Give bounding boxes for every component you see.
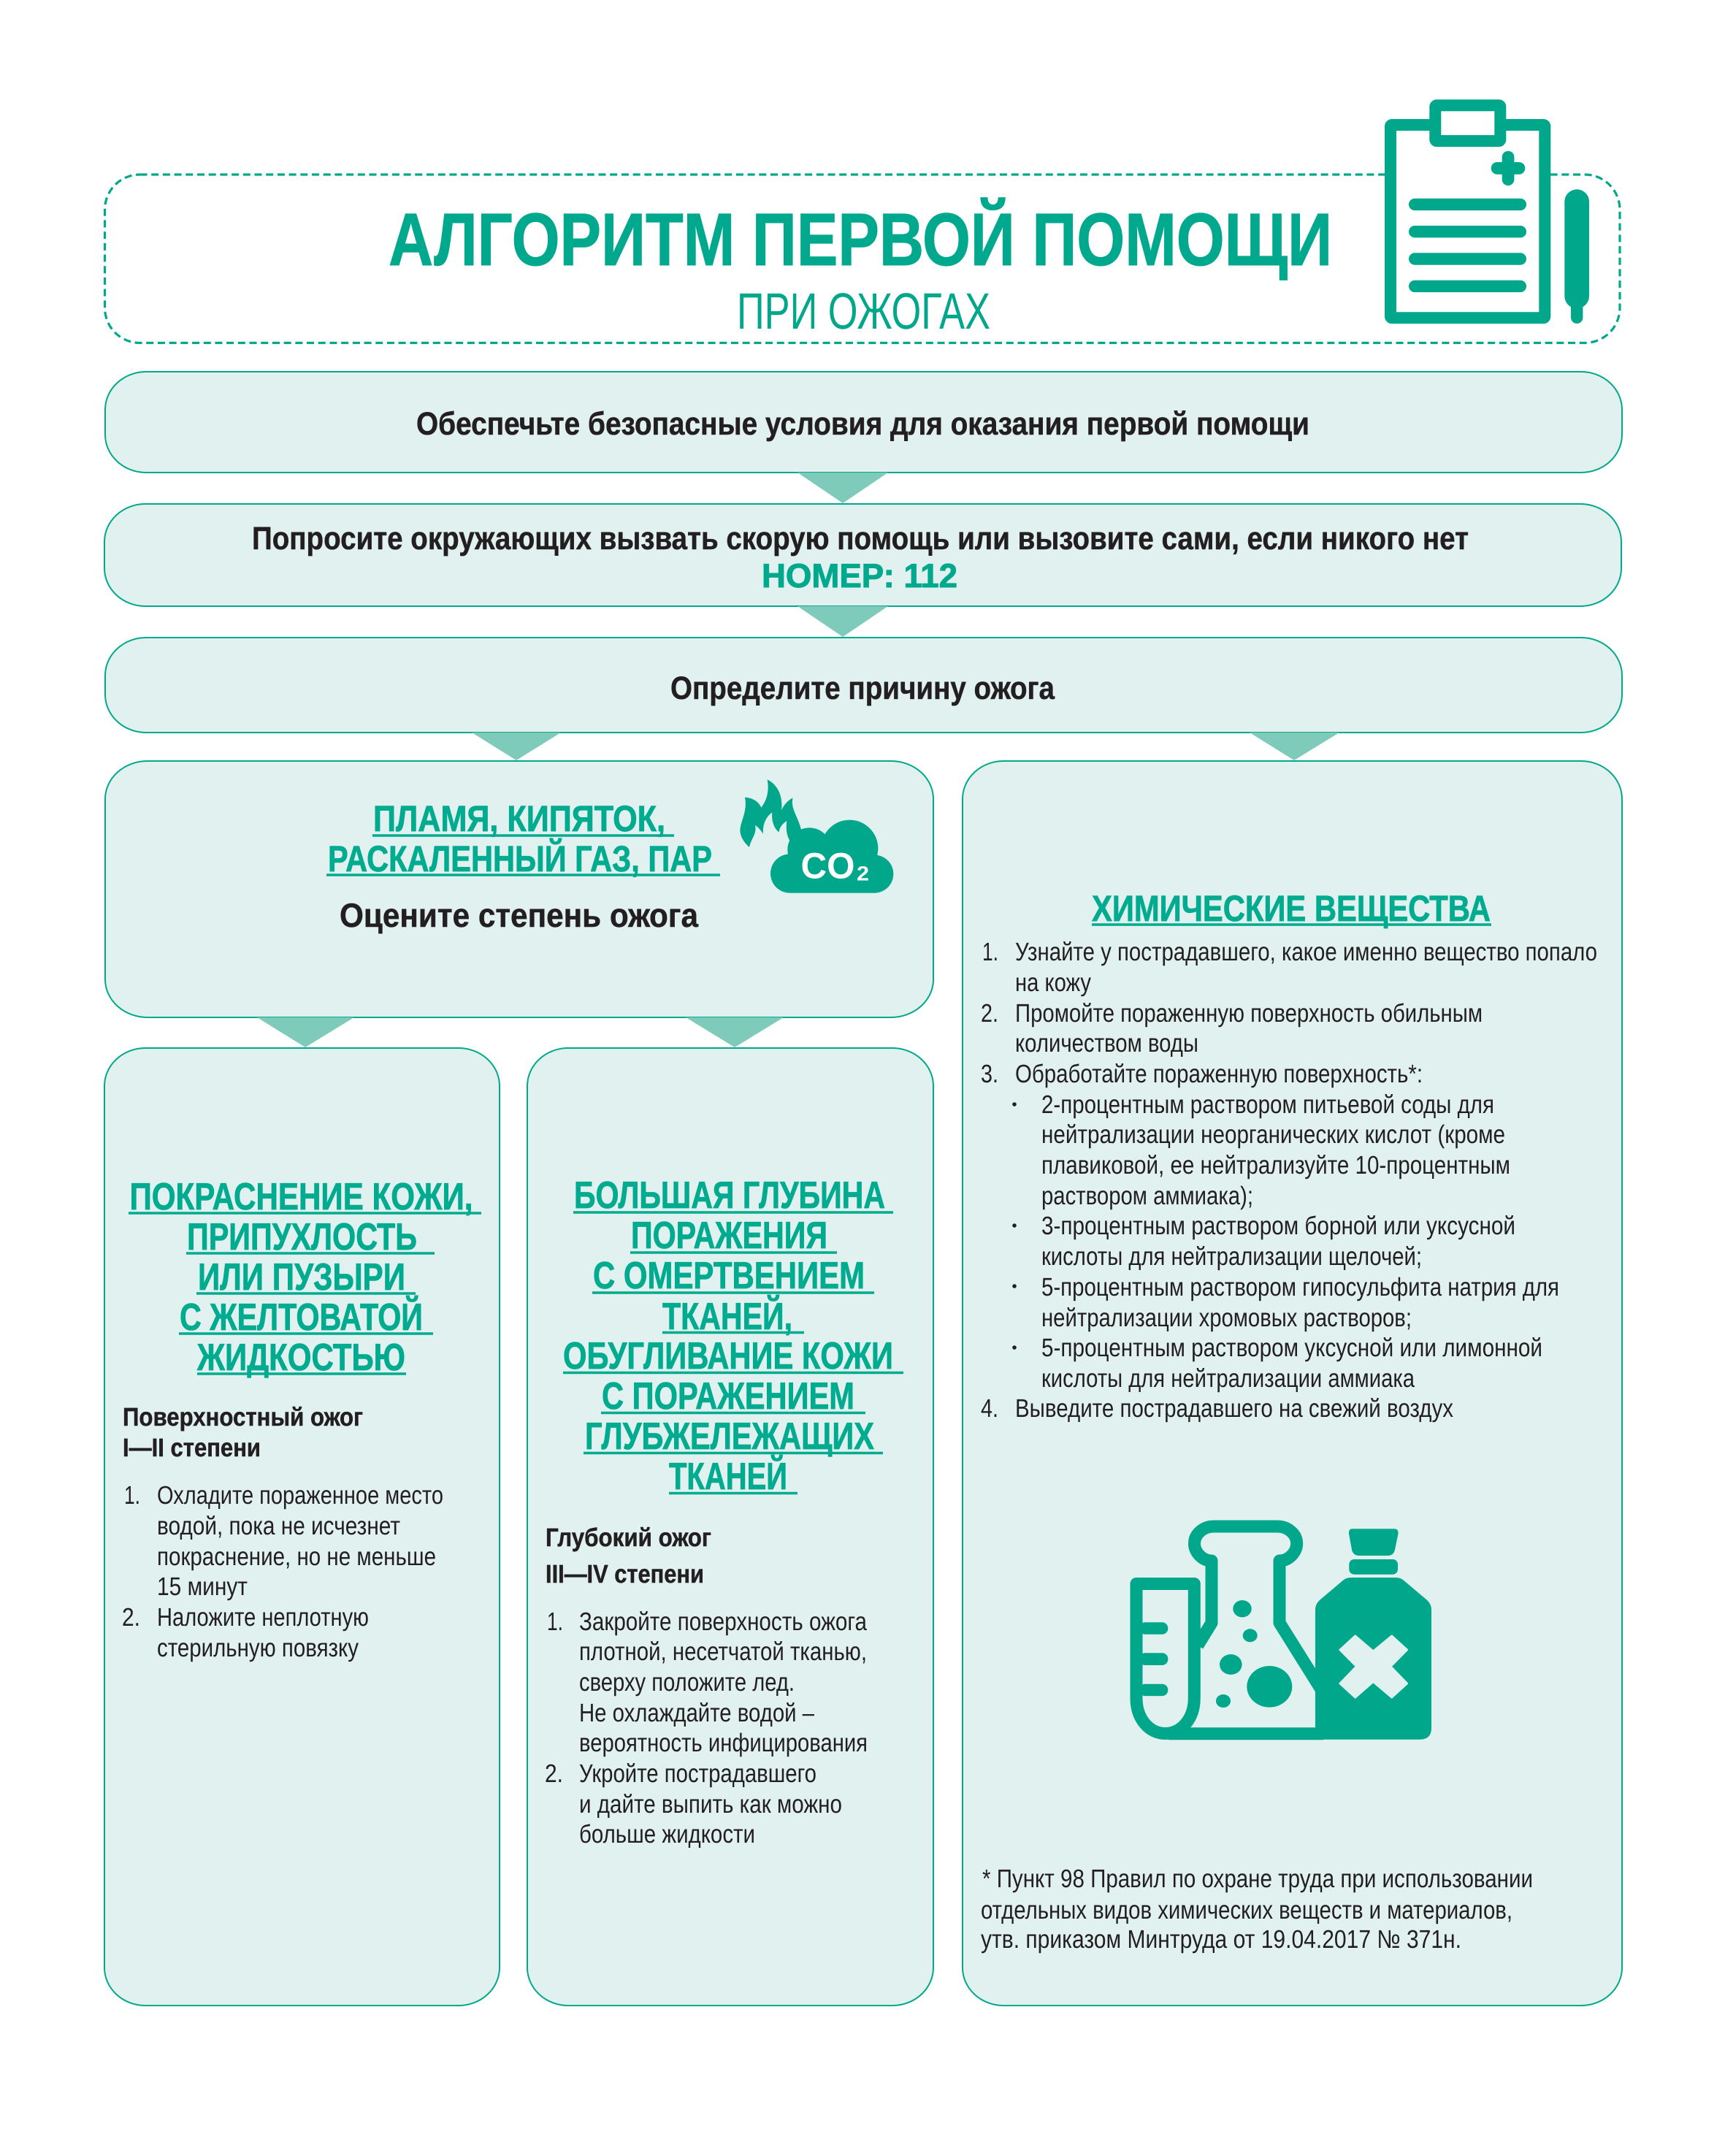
- burn degree label: Глубокий ожог: [546, 1524, 711, 1552]
- footnote: утв. приказом Минтруда от 19.04.2017 № 371н.: [981, 1925, 1461, 1954]
- heading: chemicals: ХИМИЧЕСКИЕ ВЕЩЕСТВА: [1092, 888, 1491, 929]
- burn degree label: I—II степени: [123, 1434, 261, 1462]
- heading: deep burn symptoms: ОБУГЛИВАНИЕ КОЖИ: [563, 1335, 893, 1377]
- step 1 panel: [105, 372, 1622, 473]
- first aid steps: deep burn: Не охлаждайте водой –: [579, 1699, 814, 1727]
- first aid steps: superficial burn: водой, пока не исчезнет: [157, 1512, 400, 1540]
- first aid steps: deep burn: вероятность инфицирования: [579, 1729, 868, 1757]
- footnote: отдельных видов химических веществ и материалов,: [981, 1896, 1512, 1924]
- first aid steps: deep burn: 2.: [545, 1759, 563, 1788]
- panel: superficial burn: [104, 1048, 500, 2006]
- first aid steps: chemicals: Узнайте у пострадавшего, какое именно вещество попало: [1015, 938, 1597, 966]
- subtitle: ПРИ ОЖОГАХ: [737, 283, 990, 340]
- first aid steps: chemicals: Обработайте пораженную поверхность*:: [1015, 1060, 1423, 1088]
- first aid steps: chemicals: на кожу: [1015, 968, 1091, 997]
- first aid steps: chemicals: кислоты для нейтрализации аммиака: [1041, 1364, 1415, 1393]
- heading: deep burn symptoms: БОЛЬШАЯ ГЛУБИНА: [574, 1174, 885, 1217]
- heading: deep burn symptoms: ТКАНЕЙ: [669, 1454, 787, 1498]
- first aid steps: chemicals: нейтрализации неорганических кислот (кроме: [1041, 1120, 1505, 1149]
- icon: flame and CO2 cloud: [740, 779, 893, 893]
- icon: flask, test tube and poison bottle: [1136, 1526, 1431, 1740]
- first aid steps: superficial burn: [122, 1481, 443, 1662]
- heading: deep burn symptoms: [563, 1174, 903, 1498]
- panel: chemicals: [963, 761, 1622, 2006]
- step 3 panel: [105, 638, 1622, 733]
- first aid steps: chemicals: Промойте пораженную поверхность обильным: [1015, 999, 1483, 1028]
- heading: superficial burn symptoms: С ЖЕЛТОВАТОЙ: [180, 1295, 423, 1339]
- step 3 text: Определите причину ожога: [670, 670, 1055, 706]
- burn degree label: [546, 1524, 711, 1589]
- instruction: assess degree: Оцените степень ожога: [340, 896, 698, 934]
- first aid steps: chemicals: кислоты для нейтрализации щелочей;: [1041, 1242, 1422, 1271]
- first aid steps: deep burn: Укройте пострадавшего: [579, 1759, 816, 1788]
- heading: deep burn symptoms: С ОМЕРТВЕНИЕМ: [593, 1255, 865, 1297]
- burn degree label: Поверхностный ожог: [123, 1403, 363, 1431]
- first aid steps: chemicals: 2.: [981, 999, 998, 1028]
- heading: superficial burn symptoms: ПОКРАСНЕНИЕ КОЖИ,: [130, 1176, 473, 1218]
- heading: superficial burn symptoms: [129, 1176, 481, 1379]
- first aid steps: deep burn: [545, 1608, 868, 1849]
- panel: flame, boiling water, hot gas, steam: [105, 761, 933, 1017]
- first aid steps: superficial burn: 1.: [124, 1481, 140, 1510]
- heading: superficial burn symptoms: ИЛИ ПУЗЫРИ: [198, 1256, 405, 1299]
- step 2 text: Попросите окружающих вызвать скорую помощь или вызовите сами, если никого нет: [252, 521, 1469, 557]
- icon: clipboard and thermometer: [1391, 105, 1589, 324]
- first aid steps: chemicals: количеством воды: [1015, 1029, 1198, 1058]
- first aid steps: chemicals: Выведите пострадавшего на свежий воздух: [1015, 1394, 1453, 1423]
- first aid steps: superficial burn: 2.: [122, 1603, 140, 1632]
- first aid steps: superficial burn: покраснение, но не меньше: [157, 1543, 436, 1571]
- first aid steps: deep burn: сверху положите лед.: [579, 1668, 795, 1697]
- step 1 text: Обеспечьте безопасные условия для оказания первой помощи: [416, 406, 1309, 442]
- first aid steps: chemicals: 5-процентным раствором гипосульфита натрия для: [1041, 1273, 1559, 1301]
- first aid steps: deep burn: Закройте поверхность ожога: [579, 1608, 867, 1636]
- arrow: to superficial burn: [257, 1017, 354, 1047]
- heading: superficial burn symptoms: ПРИПУХЛОСТЬ: [187, 1216, 417, 1258]
- panel: deep burn: [527, 1048, 933, 2006]
- arrow: step 3 to thermal causes: [472, 733, 561, 760]
- heading: deep burn symptoms: ТКАНЕЙ,: [662, 1294, 792, 1338]
- footnote: * Пункт 98 Правил по охране труда при использовании: [982, 1865, 1533, 1893]
- heading: deep burn symptoms: С ПОРАЖЕНИЕМ: [602, 1375, 854, 1418]
- first aid steps: chemicals: раствором аммиака);: [1041, 1182, 1253, 1210]
- heading: thermal causes: РАСКАЛЕННЫЙ ГАЗ, ПАР: [328, 838, 712, 879]
- icon: flame and CO2 cloud: CO: [800, 846, 854, 887]
- first aid steps: superficial burn: Наложите неплотную: [157, 1603, 369, 1632]
- heading: thermal causes: [326, 798, 720, 879]
- arrow: step 1 to step 2: [798, 473, 888, 503]
- dashed title frame: [105, 175, 1620, 343]
- heading: deep burn symptoms: ПОРАЖЕНИЯ: [631, 1215, 827, 1257]
- first aid steps: superficial burn: Охладите пораженное место: [157, 1481, 443, 1510]
- first aid steps: chemicals: 3-процентным раствором борной или уксусной: [1041, 1212, 1515, 1240]
- heading: deep burn symptoms: ГЛУБЖЕЛЕЖАЩИХ: [585, 1415, 874, 1458]
- heading: superficial burn symptoms: ЖИДКОСТЬЮ: [196, 1337, 405, 1379]
- emergency number: НОМЕР: 112: [762, 557, 957, 595]
- header panel: [105, 105, 1620, 343]
- first aid steps: deep burn: 1.: [547, 1608, 563, 1636]
- first aid steps: chemicals: плавиковой, ее нейтрализуйте 10-процентным: [1041, 1151, 1510, 1180]
- first aid steps: superficial burn: стерильную повязку: [157, 1634, 359, 1662]
- arrow: step 3 to chemicals: [1250, 733, 1339, 760]
- step 2 panel: [104, 504, 1621, 606]
- first aid steps: chemicals: [981, 938, 1597, 1423]
- first aid steps: deep burn: больше жидкости: [579, 1820, 755, 1849]
- first aid steps: deep burn: и дайте выпить как можно: [579, 1790, 842, 1819]
- arrow: step 2 to step 3: [798, 606, 888, 637]
- first aid steps: chemicals: 5-процентным раствором уксусной или лимонной: [1041, 1334, 1542, 1362]
- burn degree label: [123, 1403, 363, 1462]
- icon: flame and CO2 cloud: 2: [857, 863, 869, 885]
- heading: thermal causes: ПЛАМЯ, КИПЯТОК,: [373, 798, 665, 839]
- first aid steps: chemicals: 4.: [981, 1394, 998, 1423]
- burn degree label: III—IV степени: [546, 1560, 704, 1589]
- first aid steps: chemicals: 1.: [982, 938, 998, 966]
- first aid steps: chemicals: 2-процентным раствором питьевой соды для: [1041, 1090, 1494, 1119]
- first aid steps: chemicals: нейтрализации хромовых растворов;: [1041, 1304, 1412, 1332]
- first aid steps: deep burn: плотной, несетчатой тканью,: [579, 1637, 867, 1666]
- footnote: [981, 1865, 1533, 1954]
- arrow: to deep burn: [686, 1017, 784, 1047]
- first aid steps: chemicals: 3.: [981, 1060, 998, 1088]
- first aid steps: superficial burn: 15 минут: [157, 1572, 248, 1601]
- title: АЛГОРИТМ ПЕРВОЙ ПОМОЩИ: [389, 197, 1332, 281]
